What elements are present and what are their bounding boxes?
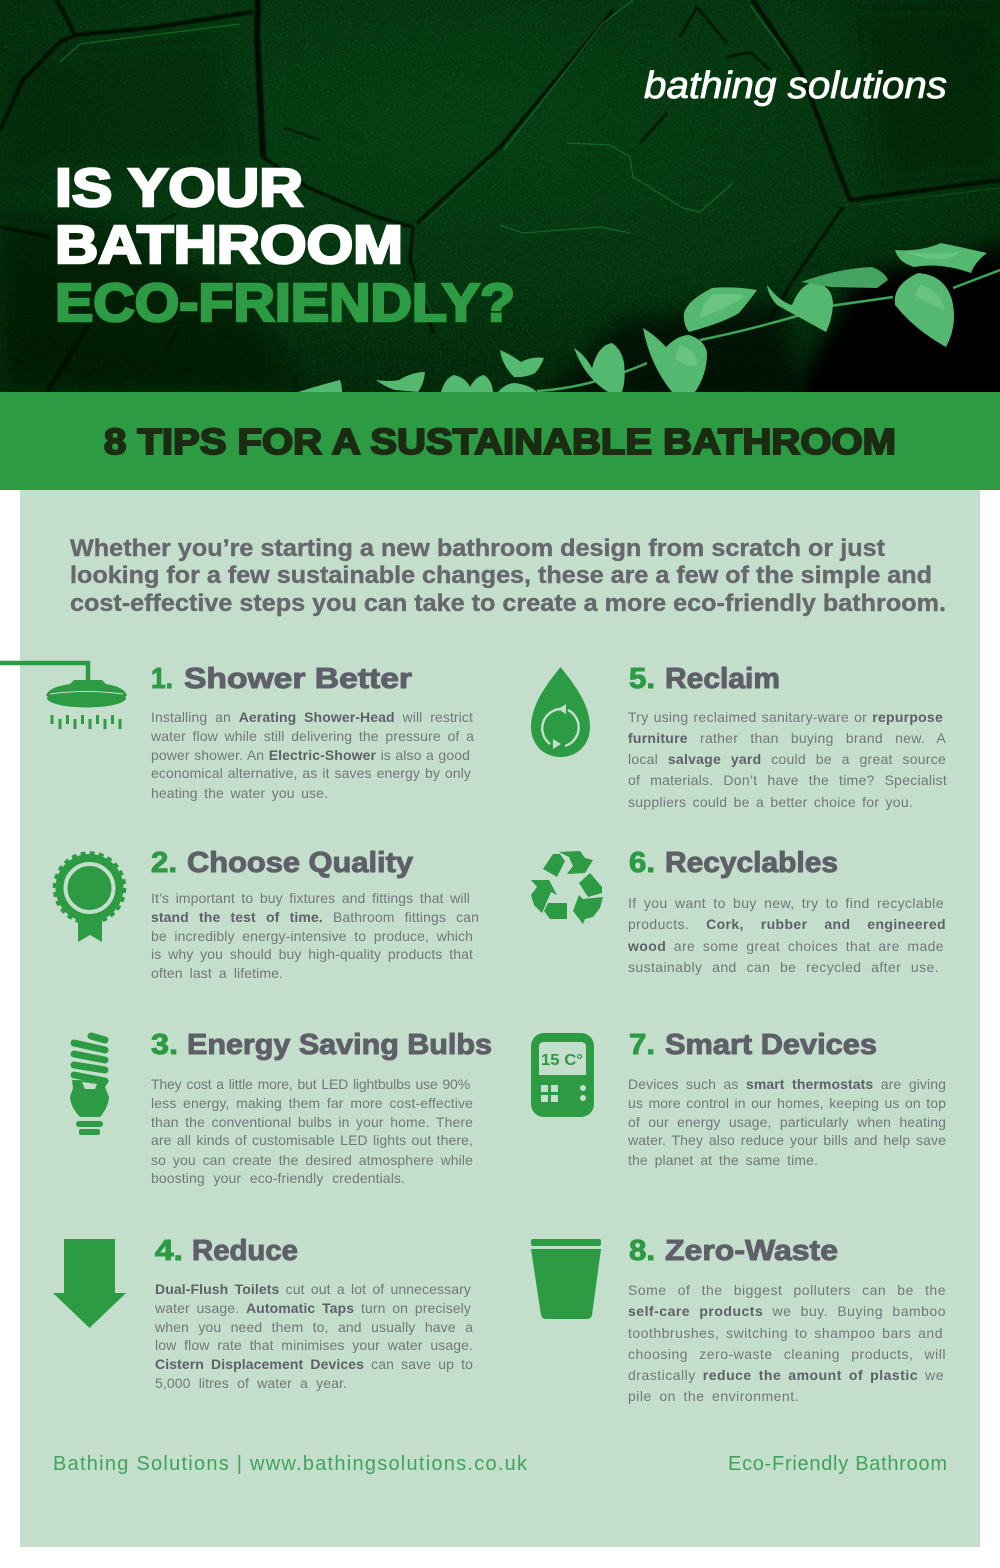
dark lower-right shadow [790,245,1000,400]
heading: 7. Smart Devices: Smart Devices [665,1029,877,1061]
body text: wood are some great choices that are made [628,938,944,954]
heading: 2. Choose Quality: Choose Quality [187,847,413,879]
tip 2: choose quality [52,847,479,980]
title [55,158,515,333]
body text: toothbrushes, switching to shampoo bars and [628,1324,943,1340]
heading: 2. Choose Quality: 2. [151,847,177,879]
banner: 8 tips: 8 TIPS FOR A SUSTAINABLE BATHROOM [104,421,896,462]
body text: of our energy usage, particularly when heating [628,1114,946,1130]
body text: low flow rate that minimises your water usage. [155,1336,473,1352]
tip 1: shower better [0,660,474,801]
footer: source and topic: Eco-Friendly Bathroom [728,1453,947,1475]
body text: less energy, making them far more cost-effective [151,1094,473,1110]
tip 6: recyclables [531,847,946,975]
intro text [70,535,946,617]
heading: 8. Zero-Waste: 8. [629,1235,655,1267]
hero: dark stone wall photo with vine [0,0,1000,392]
body text [628,894,946,975]
icon: energy saving bulb [70,1032,109,1135]
body text: 5,000 litres of water a year. [155,1374,347,1390]
heading: 7. Smart Devices: 7. [629,1029,655,1061]
body text: heating the water you use. [151,784,328,800]
body text: Cistern Displacement Devices can save up to [155,1356,473,1372]
body text: local salvage yard could be a great source [628,750,946,766]
body text: Devices such as smart thermostats are giving [628,1076,946,1092]
title: ECO-FRIENDLY? [55,273,515,333]
stone cracks [0,0,1000,392]
panel: pale green content background [20,480,980,1547]
body text: products. Cork, rubber and engineered [628,916,946,932]
icon: recycling symbol [531,851,603,924]
body text: when you need them to, and usually have a [155,1318,473,1334]
tip 7: smart devices [531,1029,946,1168]
body text: boosting your eco-friendly credentials. [151,1170,405,1186]
icon: smart thermostat: 15 C° [541,1052,583,1069]
footer: source and topic: Bathing Solutions | www.bathingsolutions.co.uk [53,1453,528,1475]
body text [628,708,947,810]
shadows on stone [0,10,1000,392]
body text: the planet at the same time. [628,1152,818,1168]
body text: water usage. Automatic Taps turn on precisely [155,1300,471,1316]
leaf highlights [675,252,960,366]
body text: If you want to buy new, try to find recyclable [628,894,944,910]
body text: Try using reclaimed sanitary-ware or repurpose [628,708,943,724]
body text: water. They also reduce your bills and help save [628,1132,946,1148]
body text [151,890,479,980]
body text: often last a lifetime. [151,964,283,980]
body text: It’s important to buy fixtures and fittings that will [151,890,470,906]
intro text: cost-effective steps you can take to create a more eco-friendly bathroom. [70,590,946,617]
body text: so you can create the desired atmosphere while [151,1152,473,1168]
title: BATHROOM [55,215,403,275]
heading: 4. Reduce: 4. [155,1235,183,1267]
vine leaves [298,243,987,392]
icon: rosette badge [52,851,126,942]
icon: waste cup [531,1239,601,1319]
intro text: looking for a few sustainable changes, these are a few of the simple and [70,562,932,589]
tip 5: reclaim [531,663,947,810]
body text: self-care products we buy. Buying bamboo [628,1302,946,1318]
vine stems [537,270,1000,391]
body text: us more control in our homes, keeping us on top [628,1094,946,1110]
banner: 8 tips [0,392,1000,490]
title: IS YOUR [55,158,303,218]
stone ridges lit green [60,0,1000,320]
tip 3: energy saving bulbs [70,1029,492,1186]
intro text: Whether you’re starting a new bathroom design from scratch or just [70,535,885,562]
icon: smart thermostat [531,1033,594,1117]
body text: furniture rather than buying brand new. A [628,730,946,746]
tip 4: reduce [53,1235,473,1391]
body text [151,708,474,801]
body text: choosing zero-waste cleaning products, will [628,1346,946,1362]
body text [155,1280,473,1391]
body text: pile on the environment. [628,1388,799,1404]
body text: Installing an Aerating Shower-Head will restrict [151,708,473,724]
tip 8: zero-waste [531,1235,946,1404]
body text: of materials. Don’t have the time? Specialist [628,772,947,788]
body text: Some of the biggest polluters can be the [628,1282,946,1298]
body text: Dual-Flush Toilets cut out a lot of unnecessary [155,1280,471,1296]
body text: power shower. An Electric-Shower is also a good [151,746,470,762]
logo: bathing solutions: bathing solutions [644,65,947,107]
heading: 3. Energy Saving Bulbs: Energy Saving Bulbs [187,1029,492,1061]
body text: is why you should buy high-quality products that [151,946,473,962]
body text [151,1076,473,1186]
body text: are all kinds of customisable LED lights out there, [151,1132,473,1148]
body text: drastically reduce the amount of plastic we [628,1366,944,1382]
body text: suppliers could be a better choice for you. [628,794,913,810]
footer: source and topic [53,1453,947,1475]
body text: They cost a little more, but LED lightbulbs use 90% [151,1076,470,1092]
icon: water drop with cycle arrows [531,667,590,757]
heading: 6. Recyclables: 6. [629,847,655,879]
body text: than the conventional bulbs in your home. There [151,1114,473,1130]
icon: down arrow [53,1239,126,1328]
body text: stand the test of time. Bathroom fittings can [151,908,479,924]
heading: 8. Zero-Waste: Zero-Waste [665,1235,838,1267]
heading: 5. Reclaim: 5. [629,663,655,695]
body text: economical alternative, as it saves energy by only [151,764,471,780]
body text: sustainably and can be recycled after use. [628,958,939,974]
heading: 1. Shower Better: 1. [151,663,173,695]
heading: 3. Energy Saving Bulbs: 3. [151,1029,178,1061]
heading: 4. Reduce: Reduce [192,1235,298,1267]
body text [628,1076,946,1168]
body text: be incredibly energy-intensive to produce, which [151,928,473,944]
icon: shower head [0,660,127,729]
body text [628,1282,946,1404]
heading: 6. Recyclables: Recyclables [665,847,838,879]
body text: water flow while still delivering the pressure of a [151,728,474,744]
heading: 5. Reclaim: Reclaim [665,663,780,695]
heading: 1. Shower Better: Shower Better [184,663,412,695]
